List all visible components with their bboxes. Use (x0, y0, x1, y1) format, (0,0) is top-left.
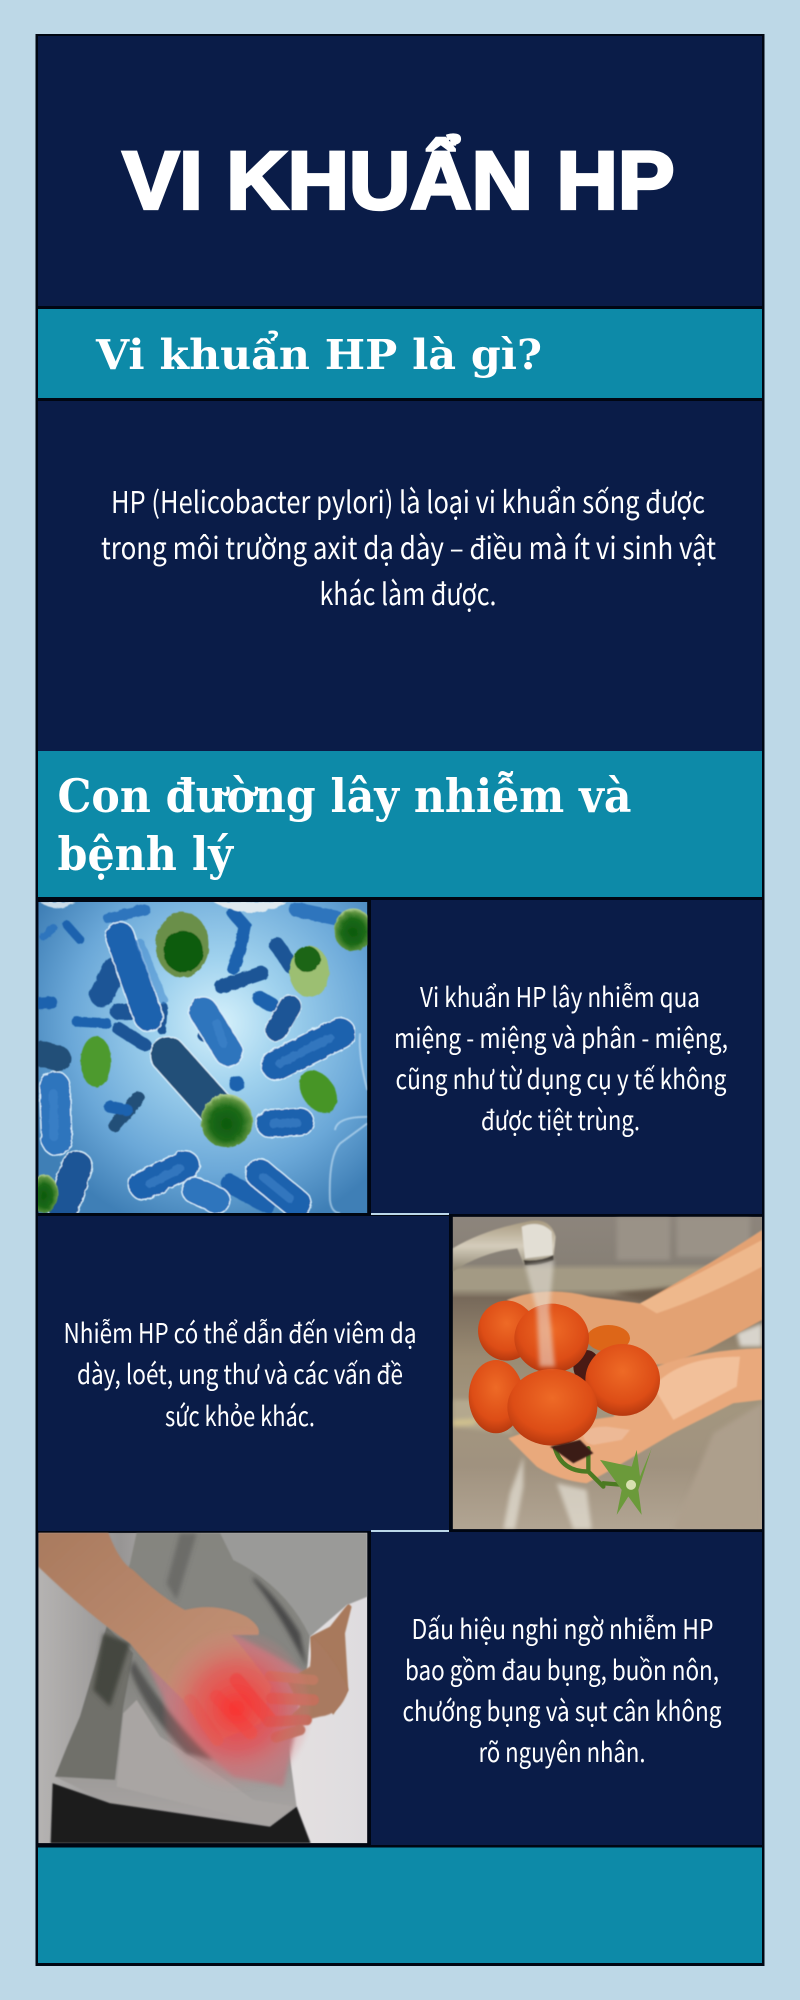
panel: footer band (38, 1848, 762, 1963)
panel: transmission heading (38, 751, 762, 897)
green cocci (30, 902, 373, 1213)
text: symptoms: chướng bụng và sụt cân không (402, 1690, 722, 1729)
text: symptoms (402, 1608, 722, 1770)
text: transmission routes: được tiệt trùng. (481, 1099, 640, 1138)
heading: what is HP: Vi khuẩn HP là gì? (95, 330, 542, 379)
pants (51, 1783, 311, 1843)
heading: transmission (58, 769, 632, 881)
decorative light divider (371, 1530, 449, 1532)
text: diseases (64, 1312, 416, 1434)
panel: title (38, 36, 762, 306)
heading: transmission: bệnh lý (58, 827, 234, 881)
text: definition: trong môi trường axit dạ dày – điều mà ít vi sinh vật (101, 524, 716, 568)
text: diseases: Nhiễm HP có thể dẫn đến viêm dạ (64, 1312, 416, 1351)
text: diseases: sức khỏe khác. (165, 1395, 315, 1434)
pale rods at right edge (330, 1033, 367, 1213)
text: symptoms: rõ nguyên nhân. (478, 1731, 646, 1770)
heading: transmission: Con đường lây nhiễm và (58, 769, 632, 823)
text: definition: HP (Helicobacter pylori) là loại vi khuẩn sống được (111, 478, 705, 522)
water and stem (503, 1260, 652, 1529)
tomatoes (469, 1301, 660, 1446)
image: washing tomatoes (452, 1216, 762, 1530)
panel: row 1 text (371, 900, 762, 1214)
faucet (453, 1220, 556, 1272)
hands (38, 1533, 348, 1740)
panel: row 3 text (371, 1532, 762, 1845)
panel: definition (38, 401, 762, 751)
text: symptoms: bao gồm đau bụng, buồn nôn, (405, 1649, 719, 1688)
decorative light divider (371, 1213, 449, 1215)
text: symptoms: Dấu hiệu nghi ngờ nhiễm HP (412, 1608, 714, 1647)
text: transmission routes: miệng - miệng và phân - miệng, (394, 1017, 728, 1056)
heading: main title: VI KHUẨN HP (122, 136, 674, 226)
text: transmission routes: Vi khuẩn HP lây nhiễm qua (420, 976, 700, 1015)
image: abdominal pain (38, 1532, 368, 1844)
red glow (163, 1630, 310, 1790)
text: definition (101, 478, 716, 614)
text: diseases: dày, loét, ung thư và các vấn đề (77, 1353, 403, 1392)
text: definition: khác làm được. (320, 570, 496, 614)
text: transmission routes (394, 976, 728, 1138)
text: transmission routes: cũng như từ dụng cụ y tế không (396, 1058, 726, 1097)
hands (507, 1230, 762, 1483)
shirt (55, 1533, 367, 1827)
panel: what is HP heading (38, 309, 762, 398)
panel: row 2 text (38, 1216, 449, 1531)
image: bacteria (38, 902, 368, 1213)
far arm (310, 1603, 352, 1715)
